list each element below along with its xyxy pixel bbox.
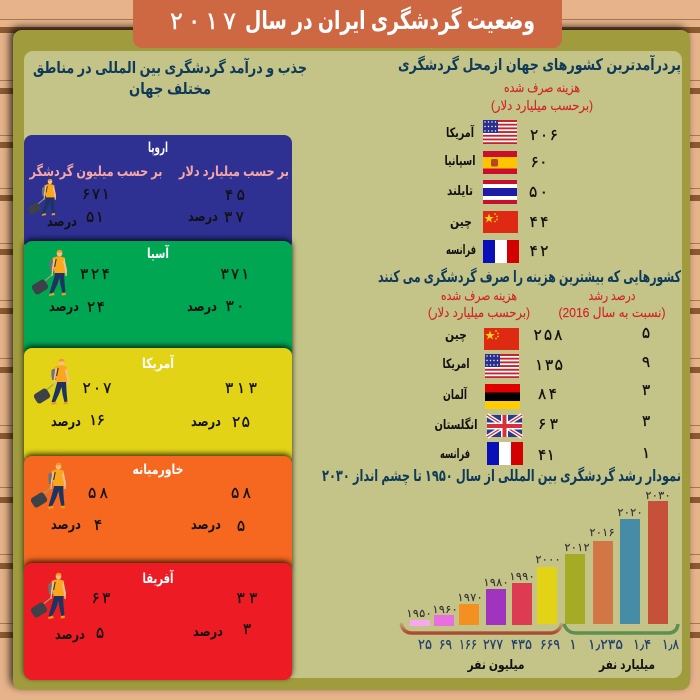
year labels: ۱۹۶۰ xyxy=(432,604,458,616)
values: درصد xyxy=(51,516,81,532)
values: ۵ xyxy=(237,518,245,535)
value labels: ۲۷۷ xyxy=(483,636,503,652)
values: ۴ xyxy=(94,517,102,534)
card: America xyxy=(24,348,292,464)
column unit: spending: (برحسب میلیارد دلار) xyxy=(428,305,530,321)
year labels xyxy=(406,490,670,620)
growth: ۳ xyxy=(642,382,650,399)
column label: dollars: بر حسب میلیارد دلار xyxy=(178,163,289,180)
title year: ۲۰۱۷ xyxy=(170,8,236,35)
country: اسپانیا xyxy=(444,153,476,168)
card: Middle East xyxy=(24,456,292,572)
values: ۱۶ xyxy=(89,412,105,429)
region name: آفریقا xyxy=(142,569,174,587)
values: ۳۷ xyxy=(224,209,244,226)
bar chart xyxy=(410,501,668,626)
region name: خاورمیانه xyxy=(132,461,184,478)
icon: traveler xyxy=(27,179,56,216)
region name: اروپا xyxy=(148,139,168,156)
value: ۴۱ xyxy=(538,447,555,464)
column label: هزینه صرف شده xyxy=(504,80,580,96)
column unit: growth: (نسبت به سال 2016) xyxy=(558,305,666,320)
unit: million people: میلیون نفر xyxy=(467,657,524,672)
values: ۲۴ xyxy=(87,299,105,316)
values: ۵۸ xyxy=(88,485,108,502)
card: Europe xyxy=(24,135,292,250)
column label: growth: درصد رشد xyxy=(588,288,636,304)
title banner xyxy=(133,0,562,48)
row: USA xyxy=(442,354,650,378)
values: ۲۰۷ xyxy=(82,380,112,397)
icon: traveler xyxy=(31,250,67,296)
value: ۲۰۶ xyxy=(530,127,558,144)
column unit: (برحسب میلیارد دلار) xyxy=(491,98,593,114)
values: ۶۳ xyxy=(92,590,110,607)
values: ۵ xyxy=(96,625,104,642)
year labels: ۲۰۱۲ xyxy=(564,542,590,554)
row: UK xyxy=(434,413,650,437)
heading second line: مختلف جهان xyxy=(129,81,211,98)
panel: top earning countries xyxy=(398,54,681,263)
year labels: ۲۰۱۶ xyxy=(590,527,614,539)
value labels: ۱۶۶ xyxy=(459,636,477,652)
icon: traveler xyxy=(30,573,66,619)
card: Africa xyxy=(24,563,292,680)
year labels: ۱۹۵۰ xyxy=(406,608,432,620)
values xyxy=(55,590,258,642)
country: چین xyxy=(445,327,467,342)
growth: ۱ xyxy=(642,445,650,462)
flag: Thailand xyxy=(483,180,517,204)
value: ۶۰ xyxy=(530,154,548,171)
country: آلمان xyxy=(443,386,467,402)
row: France xyxy=(446,240,548,263)
values: ۴۵ xyxy=(225,187,245,204)
values: ۵۱ xyxy=(86,209,104,226)
year labels: ۲۰۰۰ xyxy=(536,554,560,566)
value: ۸۴ xyxy=(538,386,557,403)
value labels: ۶۶۹ xyxy=(540,636,560,652)
values: درصد xyxy=(191,413,221,429)
heading: regional tourism: جذب و درآمد گردشگری بین المللی در مناطق xyxy=(33,57,307,77)
value: ۴۴ xyxy=(530,214,548,231)
country: فرانسه xyxy=(440,446,470,461)
values: درصد xyxy=(187,298,217,314)
bracket: billions xyxy=(564,624,678,633)
region name: آمریکا xyxy=(142,354,175,372)
icon: traveler xyxy=(33,359,69,405)
values: ۳۰ xyxy=(226,298,244,315)
values: ۳۱۳ xyxy=(225,380,257,397)
value labels: ۴۳۵ xyxy=(511,636,532,652)
icon: traveler xyxy=(30,463,66,509)
year labels: ۱۹۸۰ xyxy=(484,577,508,589)
values: ۶۷۱ xyxy=(82,186,110,203)
country: آمریکا xyxy=(446,124,474,140)
value: ۴۲ xyxy=(530,243,548,260)
value labels: ۲۵ xyxy=(418,636,432,652)
panel: growth chart xyxy=(322,466,681,672)
value labels: ۱٫۸ xyxy=(662,636,679,652)
values: درصد xyxy=(193,623,223,639)
year labels: ۱۹۹۰ xyxy=(510,571,534,583)
country: تایلند xyxy=(447,183,473,198)
growth: ۳ xyxy=(642,413,650,430)
values: ۳۲۴ xyxy=(80,266,110,283)
panel: top spending countries xyxy=(378,267,681,465)
values: درصد xyxy=(55,626,85,642)
country: امریکا xyxy=(442,356,470,371)
row: China xyxy=(445,325,650,350)
values: درصد xyxy=(47,213,77,229)
values xyxy=(47,186,245,229)
value labels: ۱٫۲۳۵ xyxy=(588,636,623,652)
card: Asia xyxy=(24,241,292,357)
value: ۲۵۸ xyxy=(534,327,562,344)
flag: Germany xyxy=(485,384,520,409)
growth: ۵ xyxy=(642,325,650,342)
panel: regional tourism xyxy=(24,57,307,680)
year labels: ۱۹۷۰ xyxy=(458,592,482,604)
region name: آسیا xyxy=(147,244,170,261)
flag: UK xyxy=(487,415,522,437)
bracket: millions xyxy=(401,623,562,633)
column label: tourists: بر حسب میلیون گردشگر xyxy=(29,163,163,180)
row: France xyxy=(440,442,650,465)
value labels: ۱ xyxy=(569,636,577,652)
values: درصد xyxy=(188,208,218,224)
value labels: ۱٫۴ xyxy=(633,636,651,652)
row: Spain xyxy=(444,151,548,174)
flag: Spain xyxy=(483,151,517,174)
country: چین xyxy=(450,214,472,229)
values: درصد xyxy=(49,298,79,314)
year labels: ۲۰۳۰ xyxy=(646,490,670,502)
values xyxy=(51,380,257,431)
values: ۵۸ xyxy=(231,485,251,502)
value: ۶۳ xyxy=(538,416,558,433)
row: USA xyxy=(446,120,558,144)
value labels xyxy=(418,636,679,652)
unit: billion people: میلیارد نفر xyxy=(598,657,655,672)
values: ۲۵ xyxy=(232,414,250,431)
year labels: ۲۰۲۰ xyxy=(618,507,642,519)
value: ۱۳۵ xyxy=(535,357,563,374)
country: انگلستان xyxy=(434,417,478,432)
country: فرانسه xyxy=(446,242,476,257)
column label: spending: هزینه صرف شده xyxy=(441,288,517,304)
values: ۳۳ xyxy=(236,590,258,607)
value labels: ۶۹ xyxy=(439,636,452,652)
values: درصد xyxy=(51,413,81,429)
values: ۳ xyxy=(243,621,251,638)
value: ۵۰ xyxy=(529,184,548,201)
growth: ۹ xyxy=(642,354,650,371)
values xyxy=(49,266,250,316)
row: Germany xyxy=(443,382,650,409)
title text: وضعیت گردشگری ایران در سال xyxy=(245,6,535,36)
row: China xyxy=(450,211,548,233)
values: درصد xyxy=(191,516,221,532)
values xyxy=(51,485,251,535)
values: ۳۷۱ xyxy=(220,266,250,283)
row: Thailand xyxy=(447,180,548,204)
